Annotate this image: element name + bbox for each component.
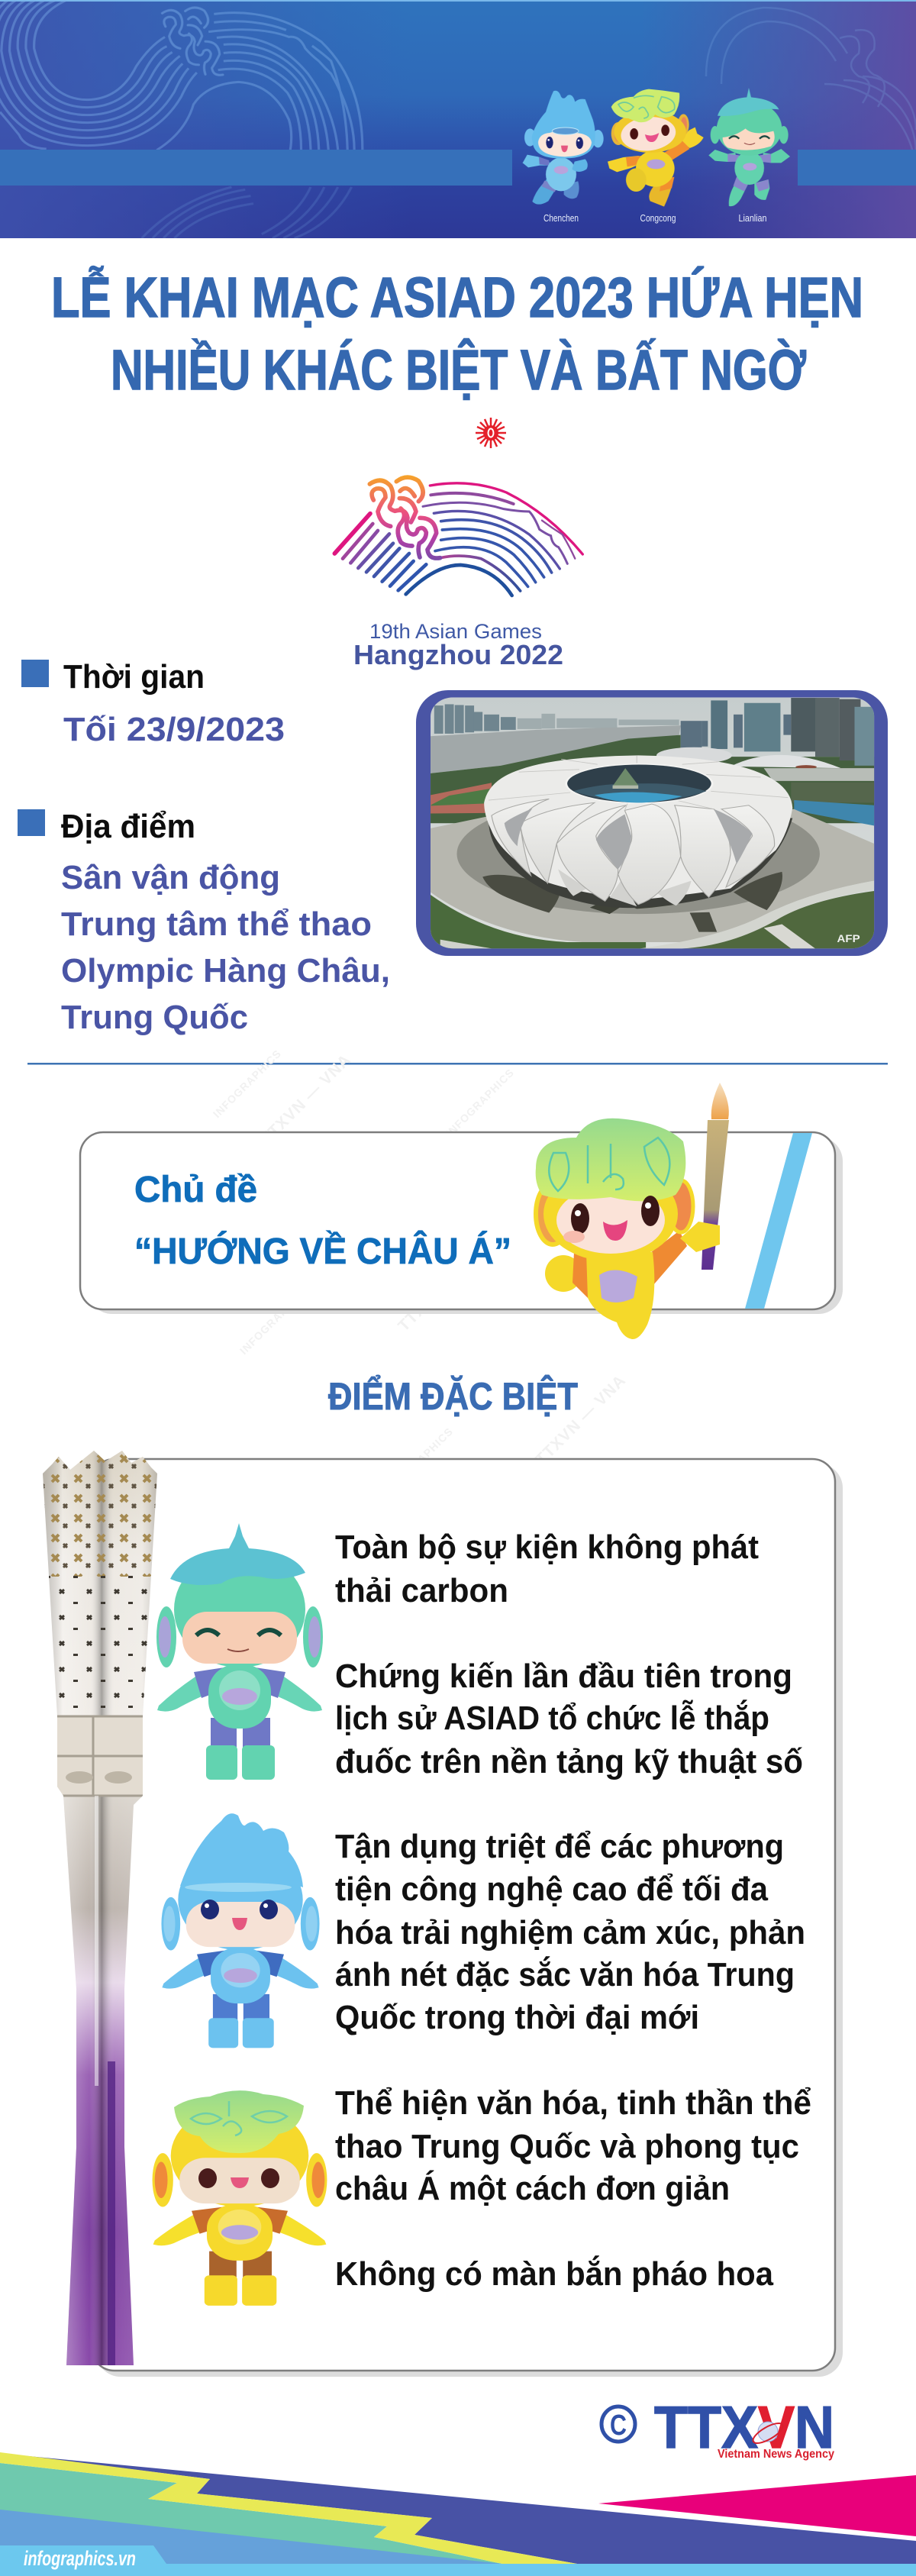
mascot: Chenchen: [523, 91, 604, 205]
watermarks: INFOGRAPHICS: [443, 1066, 517, 1139]
header band: [0, 150, 916, 186]
footer shapes: [0, 2452, 916, 2576]
bullet text: châu Á một cách đơn giản: [335, 2169, 730, 2207]
mascot: Congcong: [153, 2090, 327, 2306]
mascot with torch: [536, 1083, 729, 1339]
theme text: “HƯỚNG VỀ CHÂU Á”: [134, 1230, 511, 1272]
bullet text: Thể hiện văn hóa, tinh thần thể: [335, 2084, 811, 2122]
value: venue: [61, 859, 390, 1036]
bullet text: Không có màn bắn pháo hoa: [335, 2255, 773, 2293]
value: venue: Trung tâm thể thao: [61, 905, 372, 943]
footer site label: infographics.vn: [24, 2547, 136, 2570]
panel: special points: [92, 1459, 843, 2377]
mascot names: Lianlian: [739, 212, 766, 224]
mascot: Lianlian: [156, 1523, 323, 1780]
bullet text: tiện công nghệ cao để tối đa: [335, 1871, 769, 1908]
icon: bullet time: [21, 660, 49, 687]
bullet text: Chứng kiến lần đầu tiên trong: [335, 1658, 792, 1695]
watermarks: TTXVN — VNA: [532, 1371, 629, 1469]
bullet text: Tận dụng triệt để các phương: [335, 1828, 784, 1865]
mascot names: Congcong: [640, 212, 676, 224]
watermarks: INFOGRAPHICS: [634, 1463, 708, 1536]
torch: [38, 1447, 160, 2371]
bullet text: thải carbon: [335, 1572, 508, 1609]
bullet text: [335, 1528, 811, 2293]
panel: theme: [80, 1132, 843, 1314]
icon: red sun emblem: [476, 418, 506, 448]
logo: copyright TTXVN: C: [610, 2410, 627, 2442]
divider: [27, 1063, 888, 1064]
mascot names: [543, 212, 766, 224]
photo: Hangzhou stadium: [416, 690, 888, 956]
stripe: [745, 1133, 812, 1309]
bullet text: đuốc trên nền tảng kỹ thuật số: [335, 1743, 803, 1780]
theme text: [134, 1170, 511, 1272]
title: [51, 266, 863, 402]
bullet text: Quốc trong thời đại mới: [335, 1999, 699, 2036]
value: date: Tối 23/9/2023: [63, 711, 285, 748]
label: time: Thời gian: [63, 658, 205, 696]
bullet text: ánh nét đặc sắc văn hóa Trung: [335, 1955, 795, 1993]
heading: special points: ĐIỂM ĐẶC BIỆT: [328, 1375, 578, 1418]
header banner: [0, 0, 916, 238]
watermarks: TTXVN — VNA: [257, 1051, 354, 1148]
photo: Hangzhou stadium: AFP: [837, 934, 860, 945]
watermarks: INFOGRAPHICS: [382, 1425, 456, 1498]
mascot: Congcong: [608, 89, 704, 207]
value: venue: Trung Quốc: [61, 999, 248, 1036]
label: venue: Địa điểm: [61, 808, 195, 845]
watermarks: [211, 1047, 708, 1536]
bullet text: lịch sử ASIAD tổ chức lễ thắp: [335, 1699, 769, 1737]
logo: Hangzhou Asian Games: [334, 477, 582, 670]
bullet text: thao Trung Quốc và phong tục: [335, 2128, 799, 2165]
watermarks: TTXVN — VNA: [395, 1238, 492, 1335]
mascot: Lianlian: [708, 88, 790, 206]
icon: bullet venue: [18, 809, 45, 836]
mascots row: [523, 88, 790, 207]
theme text: Chủ đề: [134, 1170, 257, 1210]
mascot: Chenchen: [161, 1813, 320, 2048]
bullet text: hóa trải nghiệm cảm xúc, phản: [335, 1914, 805, 1951]
watermarks: INFOGRAPHICS: [211, 1047, 284, 1120]
value: venue: Sân vận động: [61, 859, 280, 896]
logo: copyright TTXVN: Vietnam News Agency: [718, 2448, 834, 2461]
logo: Hangzhou Asian Games: Hangzhou 2022: [353, 639, 563, 670]
value: venue: Olympic Hàng Châu,: [61, 952, 390, 989]
bullet text: Toàn bộ sự kiện không phát: [335, 1528, 759, 1566]
watermarks: INFOGRAPHICS: [237, 1283, 311, 1357]
mascot names: Chenchen: [543, 212, 579, 224]
logo: copyright TTXVN: TTXVN: [654, 2394, 834, 2461]
logo: Hangzhou Asian Games: 19th Asian Games: [369, 620, 542, 643]
